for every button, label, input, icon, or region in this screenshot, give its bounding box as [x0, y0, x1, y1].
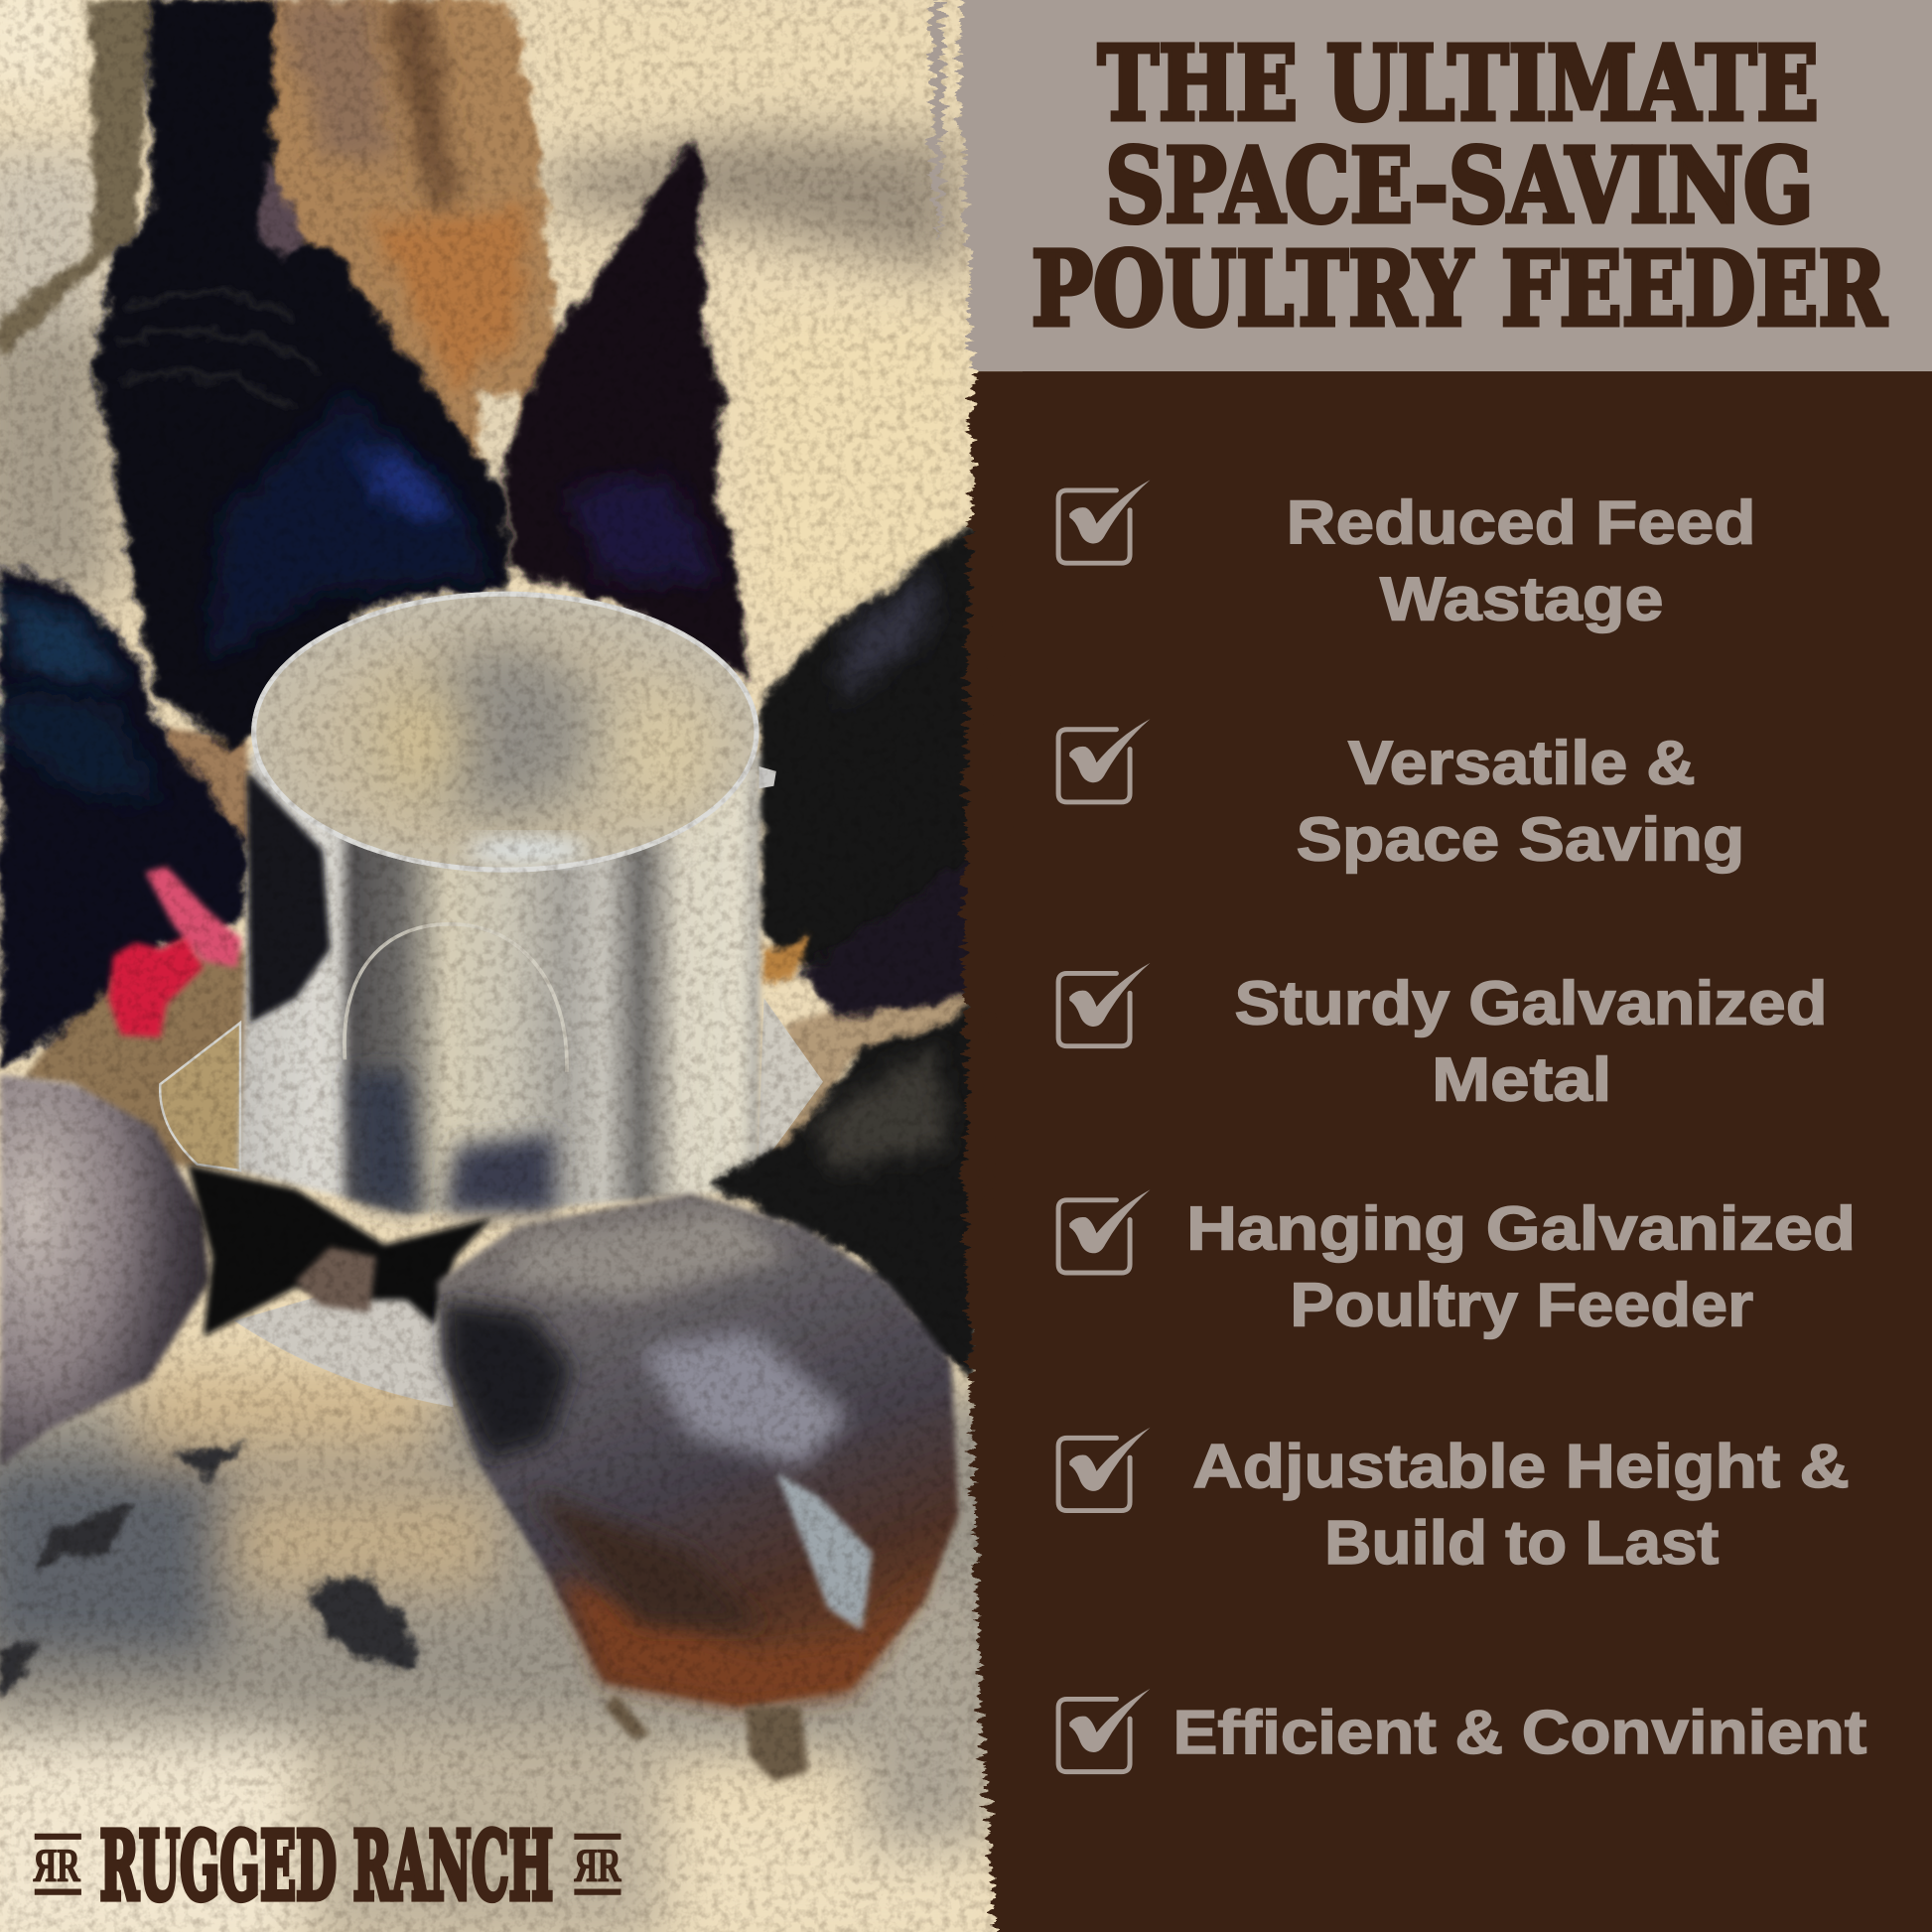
benefit 5: adjustable height and build to last: Build to Last: [1324, 1509, 1719, 1578]
sand ground: [0, 0, 1047, 1932]
feed patches around the feeder: [25, 727, 973, 1182]
benefit list: [1058, 480, 1866, 1772]
hen feet: [604, 1694, 808, 1782]
logo: Rugged Ranch: [34, 1811, 621, 1921]
panel: benefits background with torn edge: [965, 345, 1932, 1932]
title: [1032, 24, 1887, 349]
benefit 4: hanging galvanized poultry feeder: [1058, 1189, 1856, 1339]
benefit 4: hanging galvanized poultry feeder: Poultry Feeder: [1290, 1271, 1753, 1339]
benefit 6: efficient and convinient: [1058, 1689, 1866, 1772]
benefit 6: efficient and convinient: Efficient & Convinient: [1173, 1699, 1866, 1767]
rooster comb and wattle: [108, 866, 241, 1037]
logo: Rugged Ranch: RUGGED RANCH: [100, 1811, 553, 1921]
icon: checkbox: [1058, 480, 1151, 563]
hen: upright tail wedge: [505, 136, 750, 680]
hen: large navy hen behind feeder: [96, 0, 507, 752]
feed pan of the feeder: [160, 998, 823, 1407]
benefit 1: reduced feed wastage: Wastage: [1380, 565, 1663, 633]
logo mark left: ЯR: [34, 1841, 80, 1892]
hen: bottom-left grey hen: [0, 1074, 492, 1466]
icon: checkbox: [1058, 1189, 1151, 1273]
logo mark right: [574, 1834, 621, 1895]
panel: title background: [930, 0, 1932, 419]
tree trunk: [0, 0, 557, 492]
benefit 3: sturdy galvanized metal: Sturdy Galvanized: [1235, 969, 1828, 1037]
benefit 3: sturdy galvanized metal: [1058, 963, 1828, 1114]
hen: right dark hen: [759, 517, 980, 1017]
feeder bucket: [238, 594, 776, 1213]
benefit 2: versatile and space saving: [1058, 719, 1744, 874]
hen: centre grey and brown hen: [438, 1192, 959, 1782]
icon: checkbox: [1058, 1689, 1151, 1772]
benefit 5: adjustable height and build to last: Adjustable Height &: [1192, 1433, 1850, 1501]
hen: black rooster and left navy hen: [0, 564, 246, 1069]
hen: right lower black tail: [709, 1004, 980, 1374]
benefit 2: versatile and space saving: Space Saving: [1297, 805, 1744, 874]
icon: checkbox: [1058, 963, 1151, 1046]
bucket rim and interior: [254, 594, 757, 870]
benefit 5: adjustable height and build to last: [1058, 1428, 1850, 1578]
icon: checkbox: [1058, 1428, 1151, 1511]
bucket body: [238, 752, 760, 1213]
benefit 4: hanging galvanized poultry feeder: Hanging Galvanized: [1186, 1194, 1856, 1263]
benefit 1: reduced feed wastage: Reduced Feed: [1287, 488, 1756, 557]
logo mark left: [34, 1834, 81, 1895]
benefit 3: sturdy galvanized metal: Metal: [1432, 1045, 1611, 1114]
benefit 2: versatile and space saving: Versatile &: [1348, 729, 1696, 797]
benefit 1: reduced feed wastage: [1058, 480, 1756, 633]
logo mark right: ЯR: [574, 1841, 621, 1892]
sand and feather grain texture: [0, 0, 1023, 1932]
photo: hens feeding around a galvanized feeder: [0, 0, 1047, 1932]
icon: checkbox: [1058, 719, 1151, 802]
